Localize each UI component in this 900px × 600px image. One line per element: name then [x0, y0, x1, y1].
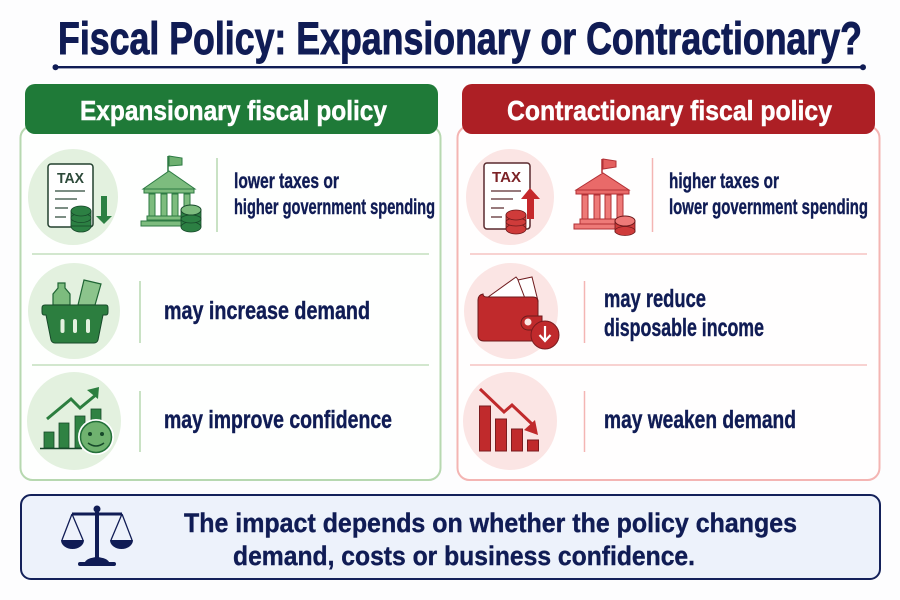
text: lower taxes: [234, 170, 435, 219]
icon: chart and smiley: [27, 372, 121, 470]
icon: government building red: [574, 159, 635, 236]
text: may reduce disposable income: [604, 285, 764, 342]
text: higher taxes: [669, 170, 868, 219]
callout text: demand, costs or business confidence.: [233, 541, 695, 571]
icon: balance scale: [61, 506, 133, 566]
panel: expansionary: [20, 84, 440, 480]
icon: falling chart: [463, 372, 557, 470]
text: may weaken demand: may weaken demand: [604, 406, 796, 434]
text: lower taxes: higher government spending: [234, 196, 435, 219]
callout text: [184, 508, 797, 571]
text: may increase demand: may increase demand: [164, 297, 370, 325]
text: higher taxes: higher taxes or: [669, 170, 779, 193]
expansionary header: [25, 84, 438, 134]
contractionary header: Contractionary fiscal policy: [507, 95, 832, 126]
icon: tax document down: TAX: [57, 170, 84, 187]
icon: wallet: [464, 263, 559, 359]
title underline: [52, 64, 866, 70]
text: may reduce disposable income: disposable income: [604, 314, 764, 342]
icon: tax document up: TAX: [492, 169, 521, 186]
icon: tax document down: [28, 149, 118, 245]
text: may improve confidence: may improve confidence: [164, 406, 392, 434]
text: may reduce disposable income: may reduce: [604, 285, 706, 313]
panel: contractionary: [458, 84, 880, 480]
contractionary header: [462, 84, 875, 134]
icon: shopping basket: [28, 263, 120, 359]
icon: government building and coins: [141, 156, 201, 232]
callout: impact: [21, 495, 880, 579]
expansionary header: Expansionary fiscal policy: [80, 95, 387, 126]
text: lower taxes: lower taxes or: [234, 170, 339, 193]
icon: tax document up: [466, 149, 554, 245]
callout text: The impact depends on whether the policy changes: [184, 508, 797, 538]
